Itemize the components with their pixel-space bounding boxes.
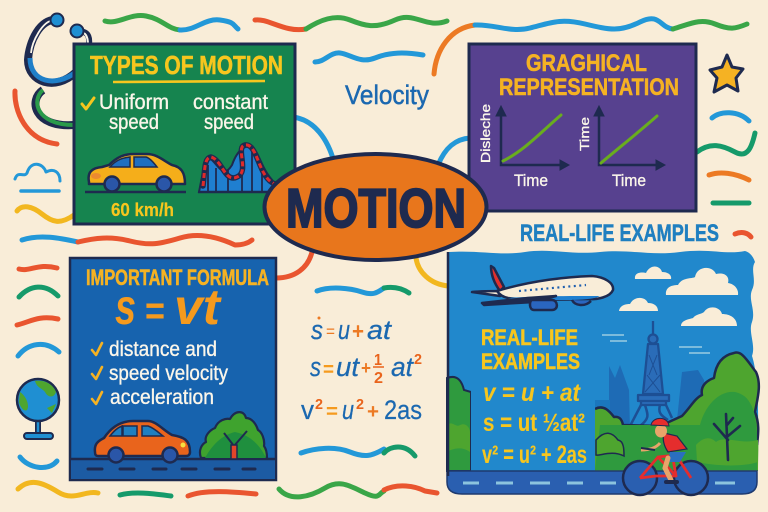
formula line 3 bbox=[301, 395, 422, 425]
text block: real-life formulas: s = ut ½at² bbox=[483, 409, 585, 437]
text: uniform speed: Uniform bbox=[99, 91, 169, 114]
panel: graphical representation bbox=[469, 44, 696, 211]
icon: tree bbox=[200, 412, 267, 459]
icon: star bbox=[710, 55, 743, 92]
chart: time over time: Time bbox=[577, 117, 592, 151]
main formula: = bbox=[145, 289, 165, 333]
formula line 3: 2 bbox=[315, 396, 323, 413]
formula line 3: = bbox=[326, 401, 338, 423]
formula line 3: u bbox=[342, 395, 354, 425]
icon: wispy lines bbox=[602, 335, 710, 353]
heading: types of motion: TYPES OF MOTION bbox=[90, 50, 283, 80]
formula line 2: 2 bbox=[374, 370, 383, 387]
title ellipse: motion: MOTION bbox=[286, 177, 466, 239]
text: speed value: 60 km/h bbox=[111, 200, 174, 220]
checklist bbox=[92, 338, 228, 409]
connector: real-life to title bbox=[416, 258, 448, 286]
formula line 3: 2 bbox=[356, 396, 364, 413]
formula line 2: at bbox=[391, 352, 414, 382]
formula line 2: 1 bbox=[374, 352, 382, 369]
icon: globe bbox=[17, 379, 59, 439]
text: constant speed: constant bbox=[193, 91, 268, 114]
heading: graphical representation bbox=[499, 50, 679, 101]
icon: yellow car bbox=[85, 154, 186, 192]
formula line 1: at bbox=[367, 315, 393, 345]
panel: types of motion bbox=[74, 44, 295, 224]
formula line 2: s bbox=[310, 352, 321, 382]
text block: real-life formulas: REAL-LIFE bbox=[481, 325, 578, 350]
formula line 1: = bbox=[326, 322, 335, 341]
heading underline bbox=[113, 81, 265, 82]
connector: graphical representation to title bbox=[438, 138, 470, 165]
formula line 2: + bbox=[361, 358, 371, 378]
icon: roller coaster bbox=[198, 145, 282, 192]
panel left edge bbox=[447, 252, 449, 476]
connector: formula to title bbox=[276, 252, 312, 278]
icon: stethoscope bbox=[28, 14, 89, 125]
panel: important formula bbox=[70, 258, 276, 480]
connector: types of motion to title bbox=[293, 117, 334, 162]
text: constant speed bbox=[193, 91, 268, 134]
icon: eiffel tower bbox=[629, 321, 672, 428]
heading: graphical representation: REPRESENTATION bbox=[499, 74, 679, 101]
chart: time over time bbox=[577, 106, 665, 190]
checklist: acceleration bbox=[110, 386, 214, 409]
scene: trees bbox=[447, 353, 759, 471]
chart: time over time: Time bbox=[612, 171, 646, 190]
formula line 3: 2as bbox=[384, 395, 422, 425]
text block: real-life formulas: EXAMPLES bbox=[481, 349, 580, 374]
text block: real-life formulas: v = u + at bbox=[483, 379, 581, 407]
text block: real-life formulas bbox=[471, 325, 595, 471]
formulas: equations of motion bbox=[301, 315, 422, 425]
formula line 2: = bbox=[323, 359, 334, 381]
text: constant speed: speed bbox=[204, 111, 254, 134]
checklist: distance and bbox=[109, 338, 217, 361]
road bbox=[71, 459, 275, 479]
heading: important formula: IMPORTANT FORMULA bbox=[86, 265, 269, 290]
heading: graphical representation: GRAGHICAL bbox=[526, 50, 647, 77]
formula line 3: v bbox=[301, 395, 314, 425]
chart: distance over time: Time bbox=[514, 171, 548, 190]
formula line 2 bbox=[310, 351, 422, 387]
panel: real-life examples bbox=[447, 220, 759, 495]
chart: distance over time: Disleche bbox=[478, 104, 493, 163]
formula line 2: 2 bbox=[414, 351, 422, 368]
icon: orange car bbox=[95, 421, 190, 462]
icon: city silhouettes bbox=[595, 365, 704, 430]
text: uniform speed bbox=[99, 91, 169, 134]
formula line 1: u bbox=[338, 315, 350, 345]
formula line 1 bbox=[311, 315, 393, 345]
main formula: s bbox=[115, 279, 136, 335]
scene: sky bbox=[449, 251, 758, 471]
text block: real-life formulas: v² = u² + 2as bbox=[482, 441, 587, 469]
formula line 3: + bbox=[367, 401, 379, 423]
icon: clouds bbox=[619, 266, 738, 326]
title ellipse: motion bbox=[264, 154, 486, 260]
formula line 2: ut bbox=[336, 352, 361, 382]
road bbox=[447, 471, 757, 494]
formula line 1: + bbox=[352, 318, 364, 344]
label: velocity: Velocity bbox=[345, 80, 429, 110]
icon: airplane bbox=[472, 266, 613, 310]
formula line 1: s bbox=[311, 315, 323, 345]
main formula: vt bbox=[174, 279, 222, 335]
main formula bbox=[115, 279, 222, 335]
text: uniform speed: speed bbox=[109, 111, 159, 134]
icon: cyclist bbox=[623, 418, 708, 495]
checklist: speed velocity bbox=[109, 362, 228, 385]
chart: distance over time bbox=[478, 104, 569, 190]
check mark bbox=[82, 98, 94, 109]
